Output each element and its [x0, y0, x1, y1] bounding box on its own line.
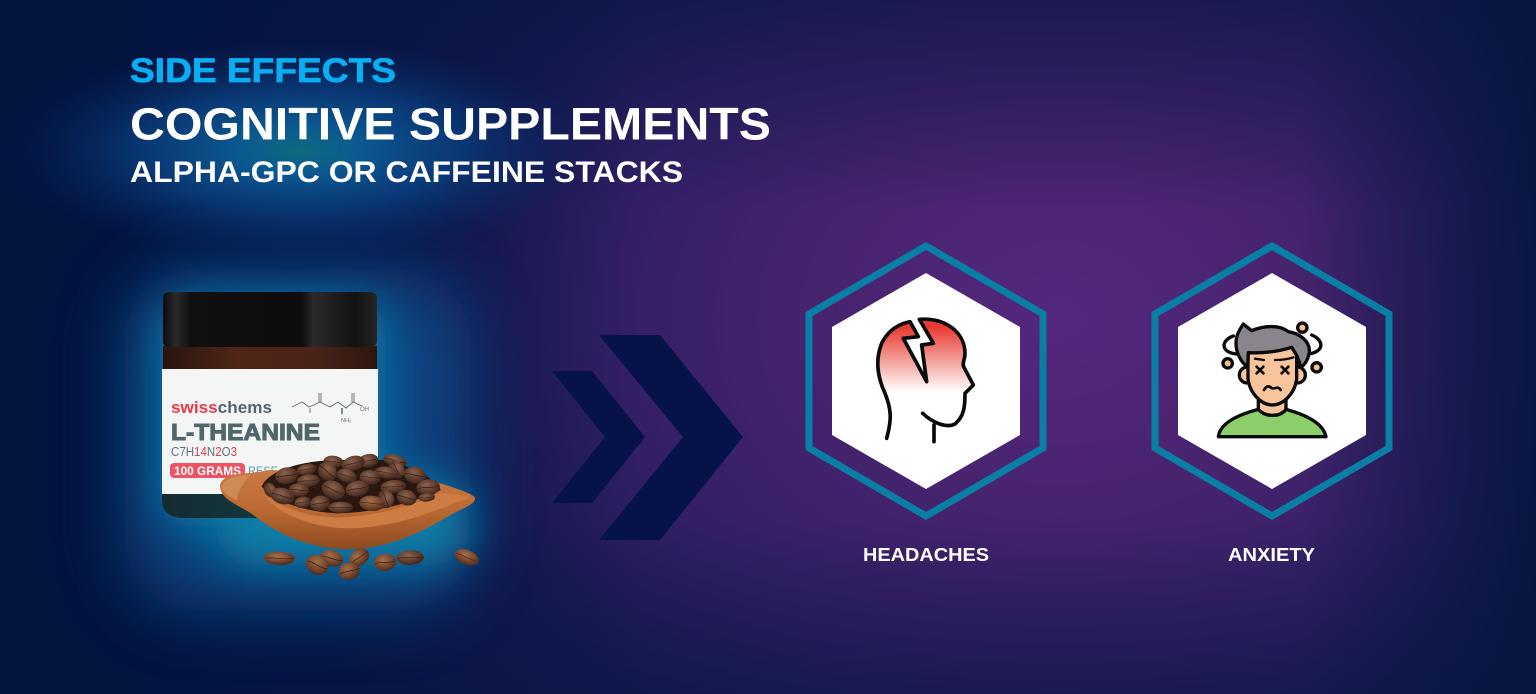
jar amber band [163, 346, 377, 370]
hair [1236, 324, 1309, 367]
dizzy dots [1298, 323, 1307, 332]
formula: C7H14N2O3 [171, 444, 237, 459]
jar label [162, 369, 378, 494]
label: anxiety: ANXIETY [1228, 544, 1316, 565]
subheading: stacks: ALPHA-GPC OR CAFFEINE STACKS [130, 156, 683, 189]
molecule diagram: OH [360, 407, 369, 413]
jar glass base [162, 490, 378, 518]
item: headaches [809, 246, 1043, 565]
product name: L-THEANINE [171, 419, 320, 445]
ears [1239, 367, 1255, 383]
heading block [130, 52, 771, 189]
research text: RESE [248, 464, 278, 478]
scoop lip highlight [263, 493, 470, 528]
orbit [1224, 335, 1321, 354]
shirt [1218, 409, 1326, 437]
brand name: swisschems [171, 399, 272, 417]
molecule diagram: NH₂ [341, 418, 351, 424]
coffee scoop [220, 452, 481, 582]
scoop wood [220, 470, 475, 549]
scoop cavity [262, 460, 441, 513]
product: supplement jar with coffee beans [162, 292, 481, 582]
neck [1258, 395, 1286, 415]
face [1248, 347, 1297, 405]
wavy mouth [1264, 386, 1281, 390]
heading: cognitive supplements: COGNITIVE SUPPLEMENTS [130, 98, 771, 150]
scoop handle highlight [222, 475, 250, 500]
product glow [125, 270, 470, 610]
jar lid [163, 292, 377, 347]
icon: dizzy man [1218, 323, 1326, 437]
hexagon outline [809, 246, 1043, 516]
arrow: double chevron [552, 335, 743, 540]
label: headaches: HEADACHES [863, 544, 989, 565]
brows [1255, 357, 1293, 360]
loose coffee beans [263, 545, 481, 582]
heading: side effects: SIDE EFFECTS [130, 52, 396, 90]
item: anxiety [1155, 246, 1389, 565]
weight badge: 100 GRAMS [174, 464, 241, 478]
molecule diagram [292, 393, 369, 424]
title glow [10, 40, 590, 260]
hexagon outline [1155, 246, 1389, 516]
icon: head with pain bolt [878, 319, 973, 442]
beans in scoop [261, 452, 441, 513]
hexagon white panel [1178, 273, 1366, 489]
hexagon white panel [832, 273, 1020, 489]
cross eyes [1257, 367, 1288, 373]
